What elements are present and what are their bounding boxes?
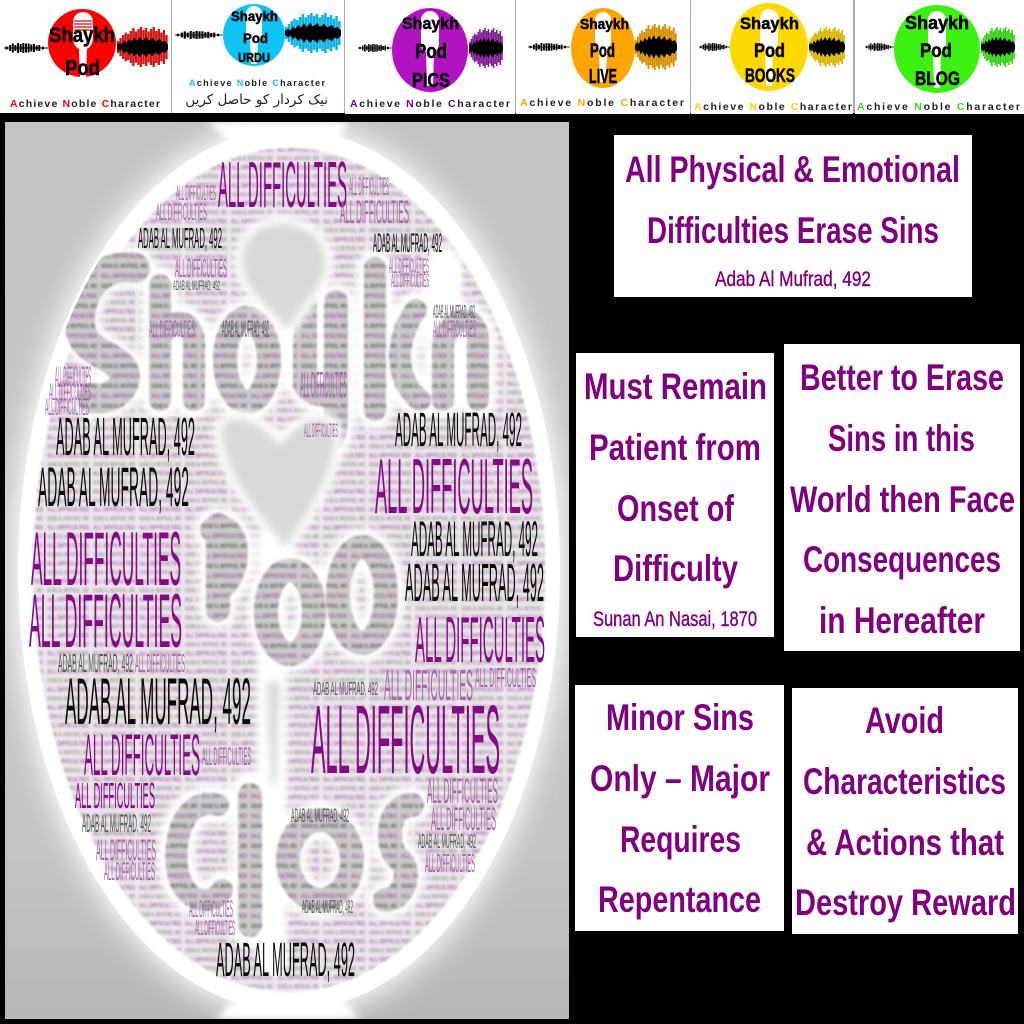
- logo card: Shaykh Pod Urdu: نیک کردار کو حاصل کریں: [185, 92, 328, 108]
- logo card: Shaykh Pod: Pod: [65, 57, 100, 80]
- large cloud words: All Difficulties: ALL DIFFICULTIES: [55, 361, 91, 394]
- large cloud words: All Difficulties: ALL DIFFICULTIES: [135, 648, 185, 678]
- large cloud words: All Difficulties: ALL DIFFICULTIES: [433, 316, 476, 343]
- logo card: Shaykh Pod Books: BOOKS: [745, 66, 795, 87]
- text: ALL DIFFICULTIES: [415, 603, 545, 676]
- large cloud words: All Difficulties: ALL DIFFICULTIES: [195, 917, 235, 940]
- large cloud words: All Difficulties: ALL DIFFICULTIES: [304, 421, 338, 442]
- large cloud words: Adab Al Mufrad, 492: ADAB AL MUFRAD, 492: [291, 806, 349, 827]
- large cloud words: All Difficulties: ALL DIFFICULTIES: [175, 253, 227, 283]
- text card: avoid characteristics: [792, 688, 1018, 934]
- logo card: Shaykh Pod Books: Achieve Noble Character: [694, 101, 852, 113]
- large cloud words: Adab Al Mufrad, 492: ADAB AL MUFRAD, 492: [173, 277, 220, 293]
- logo card: Shaykh Pod Urdu: URDU: [238, 50, 270, 65]
- large cloud words: Adab Al Mufrad, 492: ADAB AL MUFRAD, 492: [373, 228, 442, 258]
- logo card: Shaykh Pod: Achieve Noble Character: [10, 98, 160, 110]
- logo card: Shaykh Pod Pics: PICS: [412, 70, 450, 92]
- logo card: Shaykh Pod: Shaykh: [49, 24, 115, 47]
- logo card: Shaykh Pod Blog: BLOG: [915, 69, 960, 90]
- logo card: Shaykh Pod Urdu: Pod: [243, 30, 268, 46]
- large cloud words: All Difficulties: ALL DIFFICULTIES: [31, 517, 181, 602]
- large cloud words: All Difficulties: ALL DIFFICULTIES: [45, 394, 89, 421]
- text card: better to erase sins: Sins in this: [828, 418, 975, 459]
- large cloud words: Adab Al Mufrad, 492: [38, 223, 544, 987]
- large cloud words: All Difficulties: ALL DIFFICULTIES: [425, 848, 475, 878]
- large cloud words: All Difficulties: ALL DIFFICULTIES: [218, 148, 347, 221]
- large cloud words: All Difficulties: ALL DIFFICULTIES: [300, 364, 347, 405]
- text card: all physical and emotional difficulties: Difficulties Erase Sins: [647, 210, 939, 251]
- large cloud words: Adab Al Mufrad, 492: ADAB AL MUFRAD, 492: [433, 302, 475, 322]
- text card: better to erase sins: [784, 344, 1020, 651]
- text card: must remain patient: [576, 353, 774, 637]
- large cloud words: Adab Al Mufrad, 492: ADAB AL MUFRAD, 492: [222, 316, 269, 343]
- text: ALL DIFFICULTIES: [427, 772, 498, 811]
- logo card: Shaykh Pod Live: Achieve Noble Character: [520, 97, 684, 109]
- logo card: Shaykh Pod Live: Shaykh: [580, 16, 629, 33]
- logo card: Shaykh Pod Pics: Shaykh: [402, 14, 459, 33]
- text card: minor sins only: Requires: [620, 819, 741, 860]
- text card: minor sins only: Only – Major: [590, 758, 770, 799]
- large cloud words: Adab Al Mufrad, 492: ADAB AL MUFRAD, 492: [302, 897, 353, 917]
- large cloud words: Adab Al Mufrad, 492: ADAB AL MUFRAD, 492: [313, 679, 378, 699]
- logo card: Shaykh Pod Books: Pod: [754, 41, 785, 62]
- large cloud words: All Difficulties: ALL DIFFICULTIES: [156, 199, 207, 226]
- large cloud words: Adab Al Mufrad, 492: ADAB AL MUFRAD, 492: [56, 407, 195, 467]
- logo card: Shaykh Pod Books: [691, 0, 853, 114]
- large cloud words: All Difficulties: ALL DIFFICULTIES: [189, 896, 233, 923]
- logo strip: [0, 0, 1024, 114]
- text card: better to erase sins: in Hereafter: [819, 600, 985, 641]
- large cloud words: Adab Al Mufrad, 492: ADAB AL MUFRAD, 492: [65, 664, 251, 738]
- logo card: Shaykh Pod Urdu: [172, 0, 344, 113]
- large cloud words: All Difficulties: ALL DIFFICULTIES: [84, 723, 200, 788]
- large cloud words: All Difficulties: ALL DIFFICULTIES: [29, 579, 182, 664]
- large cloud words: All Difficulties: ALL DIFFICULTIES: [391, 271, 429, 292]
- large cloud words: All Difficulties: ALL DIFFICULTIES: [349, 173, 389, 201]
- large cloud words: All Difficulties: ALL DIFFICULTIES: [340, 194, 409, 230]
- large cloud words: Adab Al Mufrad, 492: ADAB AL MUFRAD, 492: [58, 648, 133, 678]
- text: ADAB AL MUFRAD, 492: [411, 511, 538, 567]
- text card: must remain patient: Must Remain: [584, 366, 767, 407]
- text card: must remain patient: Difficulty: [613, 548, 738, 589]
- text card: minor sins only: [575, 685, 784, 931]
- large cloud words: Adab Al Mufrad, 492: ADAB AL MUFRAD, 492: [138, 223, 222, 255]
- text card: must remain patient: Onset of: [617, 488, 735, 529]
- large cloud words: Adab Al Mufrad, 492: ADAB AL MUFRAD, 492: [82, 810, 151, 838]
- logo card: Shaykh Pod Blog: Pod: [920, 41, 952, 62]
- text: ALL DIFFICULTIES: [431, 801, 496, 837]
- logo card: Shaykh Pod Blog: [855, 0, 1024, 114]
- large cloud words: All Difficulties: ALL DIFFICULTIES: [202, 743, 251, 771]
- large cloud words: All Difficulties: ALL DIFFICULTIES: [389, 255, 429, 278]
- logo card: Shaykh Pod Pics: Achieve Noble Character: [350, 98, 510, 110]
- text card: avoid characteristics: Avoid: [865, 700, 944, 741]
- text: ALL DIFFICULTIES: [384, 661, 473, 710]
- text: ALL DIFFICULTIES: [475, 662, 536, 693]
- large cloud words: All Difficulties: [29, 148, 545, 940]
- logo card: Shaykh Pod Urdu: Achieve Noble Character: [189, 78, 325, 88]
- text card: must remain patient: Patient from: [589, 427, 761, 468]
- text card: minor sins only: Repentance: [598, 879, 761, 920]
- logo card: Shaykh Pod Pics: [345, 0, 515, 114]
- logo card: Shaykh Pod Urdu: Shaykh: [231, 9, 278, 24]
- large cloud words: All Difficulties: ALL DIFFICULTIES: [75, 775, 155, 816]
- logo card: Shaykh Pod Live: Pod: [590, 41, 615, 62]
- large cloud words: All Difficulties: ALL DIFFICULTIES: [49, 379, 91, 406]
- logo card: Shaykh Pod Live: [516, 0, 690, 114]
- large cloud words: Adab Al Mufrad, 492: ADAB AL MUFRAD, 492: [418, 831, 476, 853]
- text card: minor sins only: Minor Sins: [606, 697, 754, 738]
- large cloud words: All Difficulties: ALL DIFFICULTIES: [104, 858, 155, 886]
- large cloud words: All Difficulties: ALL DIFFICULTIES: [96, 834, 156, 867]
- word cloud panel: [5, 122, 569, 1019]
- large cloud words: Adab Al Mufrad, 492: ADAB AL MUFRAD, 492: [216, 934, 355, 987]
- microphone silhouette: [222, 224, 335, 785]
- logo card: Shaykh Pod Blog: Achieve Noble Character: [857, 101, 1020, 113]
- logo card: Shaykh Pod Books: Shaykh: [740, 14, 799, 33]
- logo card: Shaykh Pod Live: LIVE: [589, 66, 617, 88]
- text: ADAB AL MUFRAD, 492: [395, 404, 522, 457]
- large cloud words: All Difficulties: ALL DIFFICULTIES: [176, 182, 216, 205]
- logo card: Shaykh Pod Blog: Shaykh: [905, 13, 969, 33]
- text: ADAB AL MUFRAD, 492: [405, 553, 544, 613]
- text card: all physical and emotional difficulties: [614, 135, 972, 297]
- text card: all physical and emotional difficulties: Adab Al Mufrad, 492: [715, 268, 871, 291]
- logo card: Shaykh Pod Pics: Pod: [415, 41, 447, 63]
- large cloud words: Adab Al Mufrad, 492: ADAB AL MUFRAD, 492: [38, 455, 189, 518]
- large cloud words: All Difficulties: ALL DIFFICULTIES: [149, 316, 195, 343]
- logo card: Shaykh Pod: [0, 0, 171, 113]
- text card: must remain patient: Sunan An Nasai, 1870: [593, 608, 757, 631]
